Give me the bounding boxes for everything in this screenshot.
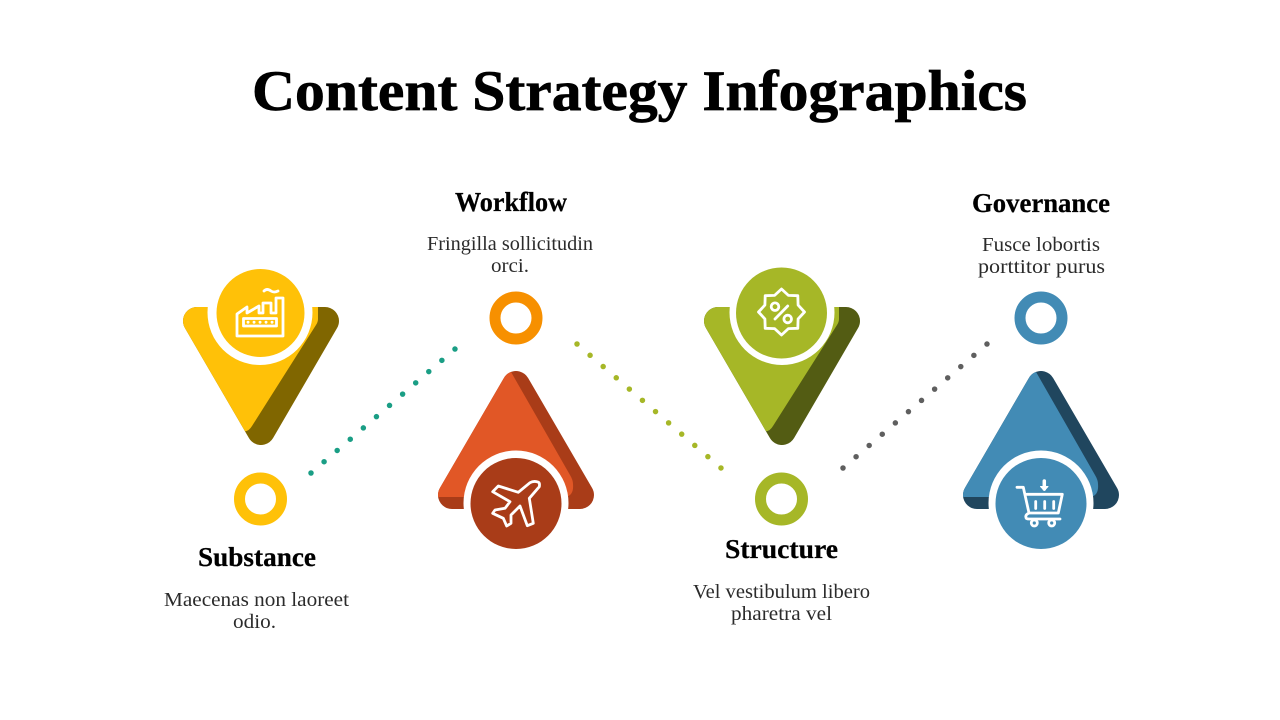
orange marker ring — [495, 297, 537, 339]
panel: structure — [693, 260, 870, 625]
text: substance description: odio. — [233, 612, 276, 633]
green triangle back — [718, 321, 846, 431]
yellow marker ring — [240, 478, 282, 520]
yellow triangle back — [197, 321, 325, 431]
yellow icon disc — [216, 269, 304, 357]
green triangle front — [704, 307, 839, 431]
text: structure description: Vel vestibulum libero — [693, 582, 870, 603]
dotted connector: gray — [843, 344, 988, 468]
dotted connector: green — [577, 344, 722, 468]
text: workflow description: orci. — [491, 256, 529, 277]
green icon disc — [736, 268, 827, 358]
heading: workflow: Workflow — [455, 187, 567, 217]
text: workflow description: Fringilla sollicitudin — [427, 234, 593, 255]
text: structure description — [693, 582, 870, 625]
icon: airplane — [493, 481, 540, 526]
white ring — [988, 450, 1094, 556]
blue triangle front — [963, 372, 1098, 497]
panel: governance — [963, 188, 1110, 556]
icon: factory — [237, 290, 283, 336]
text: workflow description — [427, 234, 593, 277]
icon: discount badge — [758, 289, 804, 335]
panel: substance — [164, 260, 350, 633]
icon: shopping cart — [1017, 481, 1062, 526]
text: structure description: pharetra vel — [731, 604, 833, 625]
text: governance description: Fusce lobortis — [982, 235, 1100, 256]
blue marker ring — [1020, 297, 1062, 339]
blue icon disc — [996, 458, 1086, 549]
text: governance description: porttitor purus — [978, 257, 1105, 278]
yellow triangle front — [183, 307, 318, 431]
title: Content Strategy Infographics — [252, 60, 1027, 123]
text: substance description: Maecenas non laoreet — [164, 590, 350, 611]
heading: structure: Structure — [725, 534, 838, 564]
text: governance description — [978, 235, 1105, 278]
white ring — [730, 260, 834, 365]
white ring — [464, 450, 568, 556]
red icon disc — [470, 458, 562, 549]
red triangle front — [438, 372, 573, 497]
heading: governance: Governance — [972, 188, 1110, 218]
panel: workflow — [427, 187, 593, 556]
green marker ring — [760, 478, 802, 520]
dotted connector: teal — [311, 349, 456, 473]
red triangle back — [452, 385, 580, 495]
heading: substance: Substance — [198, 542, 316, 572]
white ring — [208, 260, 312, 365]
blue triangle back — [977, 385, 1105, 495]
text: substance description — [164, 590, 350, 633]
